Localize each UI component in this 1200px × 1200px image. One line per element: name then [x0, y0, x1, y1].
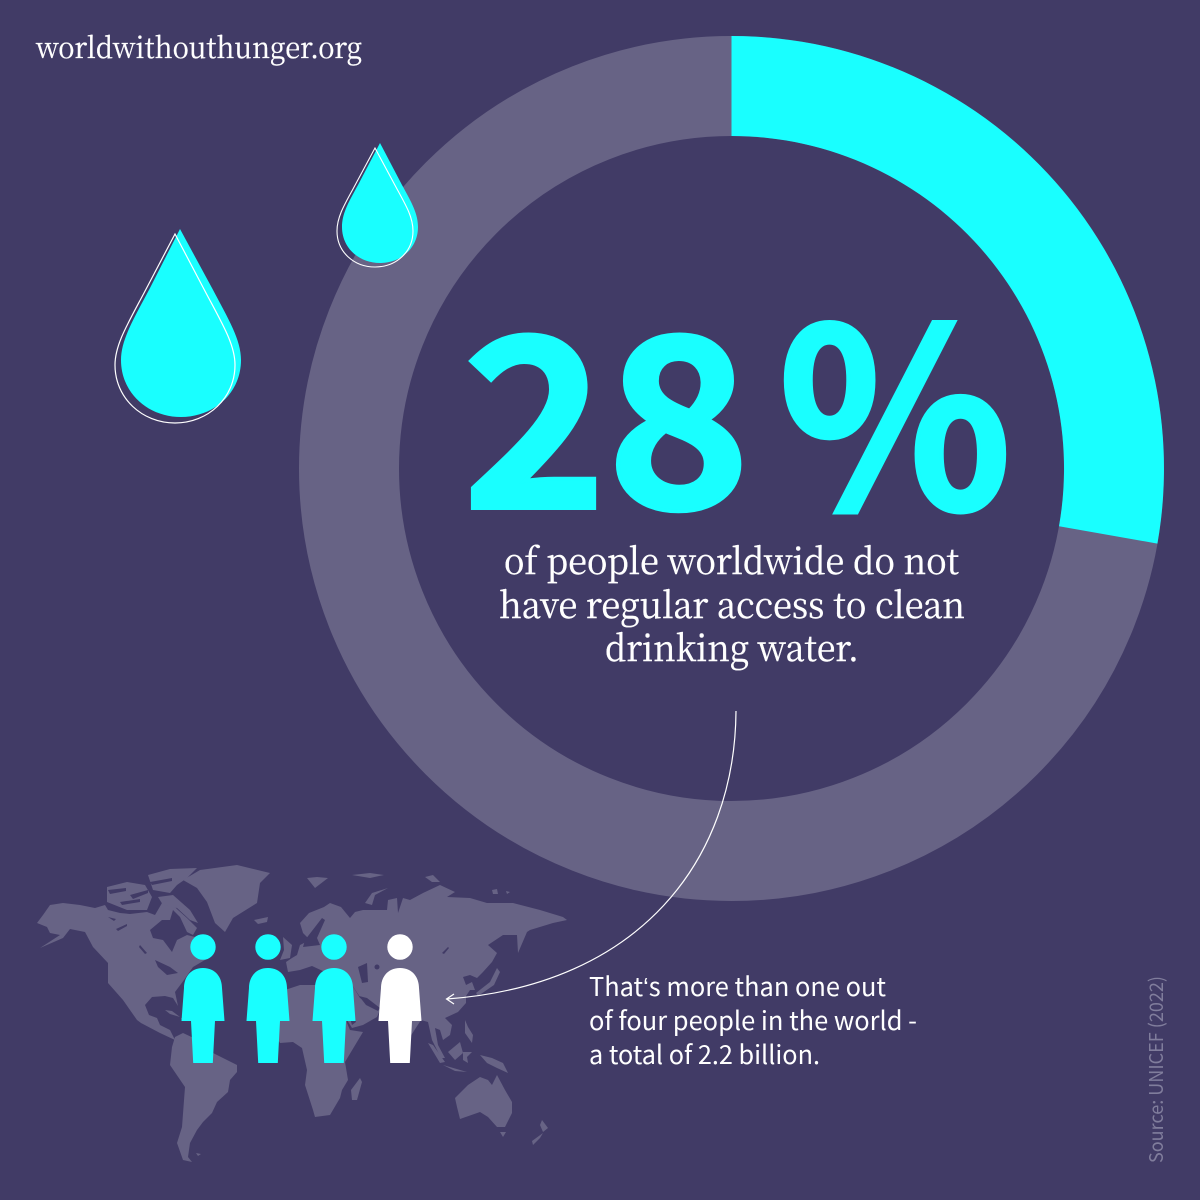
- cyan segment of donut: [732, 36, 1164, 544]
- arabia and africa: [270, 985, 380, 1117]
- north and central america: [37, 903, 210, 1040]
- donut chart: 28 percent: [349, 36, 1164, 851]
- icon: person 2 cyan: [246, 934, 290, 1063]
- japan: [476, 968, 500, 996]
- icon: large water drop: [115, 229, 241, 423]
- northern islands: [307, 873, 510, 905]
- arctic islands: [107, 868, 198, 923]
- big number: 28 percent: %: [778, 222, 1012, 581]
- world map: [37, 865, 567, 1162]
- main statement text: [499, 534, 965, 672]
- callout text: of four people in the world -: [589, 1001, 917, 1038]
- new zealand: [532, 1120, 548, 1145]
- website label: worldwithouthunger.org: [35, 26, 362, 67]
- source note: Source: UNICEF (2022): [1142, 976, 1169, 1163]
- greenland: [183, 865, 270, 932]
- eurasia: [286, 885, 567, 1058]
- main statement text: drinking water.: [605, 621, 859, 672]
- icon: person 1 cyan: [182, 934, 224, 1063]
- callout text: a total of 2.2 billion.: [589, 1035, 820, 1072]
- icon: person 4 white: [378, 934, 422, 1063]
- cuba and caribbean: [165, 1010, 187, 1021]
- icon: person 3 cyan: [312, 934, 356, 1063]
- inland seas and lakes: [108, 878, 449, 1025]
- big number: 28 percent: [462, 222, 1012, 581]
- madagascar: [351, 1078, 362, 1100]
- iceland and uk: [254, 917, 292, 960]
- main statement text: of people worldwide do not: [504, 534, 959, 585]
- icon: small water drop: [337, 143, 418, 267]
- southeast asian islands: [428, 1020, 508, 1073]
- australia and tasmania: [455, 1075, 512, 1137]
- arrow from statement to people: [446, 711, 736, 1004]
- big number: 28 percent: 28: [462, 234, 750, 576]
- callout text: [589, 967, 917, 1072]
- callout text: That‘s more than one out: [589, 967, 886, 1004]
- south america: [170, 1033, 237, 1162]
- main statement text: have regular access to clean: [499, 578, 965, 629]
